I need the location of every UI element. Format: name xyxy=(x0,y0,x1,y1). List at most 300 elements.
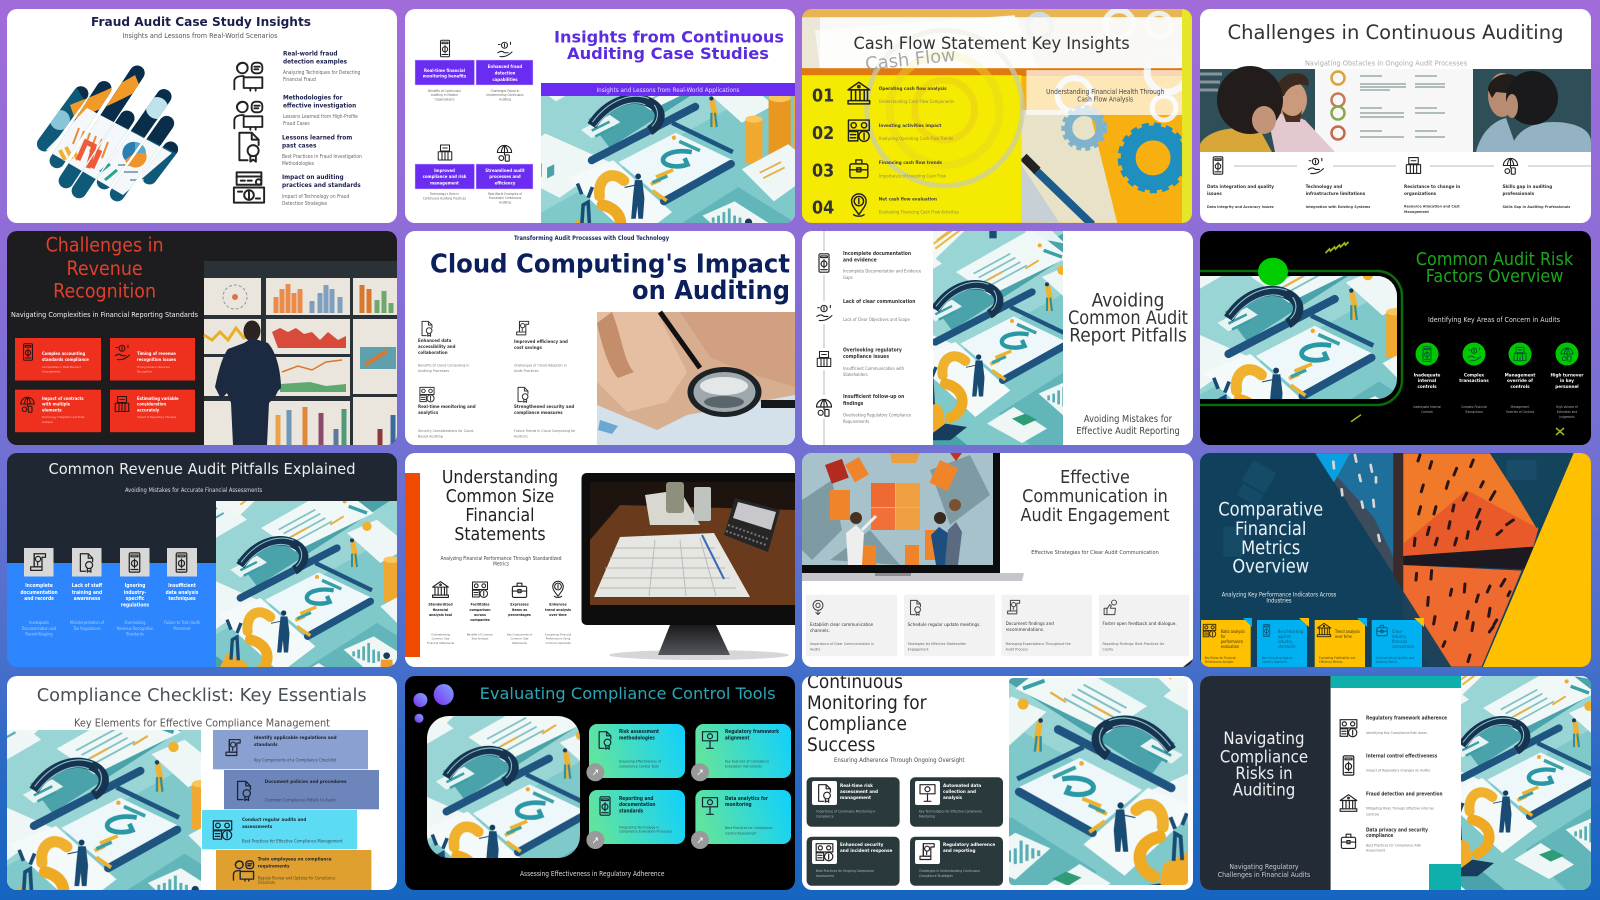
red cards: Arrangements xyxy=(42,370,61,374)
monitor with desk photo xyxy=(582,473,795,660)
four columns: Statements xyxy=(512,641,528,645)
tool cards xyxy=(586,724,791,849)
tool cards: Key Features of Compliance xyxy=(725,759,769,763)
pitfall columns: Insufficient xyxy=(168,583,197,589)
title: Metrics xyxy=(1241,538,1300,559)
yellow list panel xyxy=(802,75,1021,223)
subtitle: Metrics xyxy=(493,561,509,568)
dark cards: Compliance Strategies xyxy=(919,874,953,878)
title xyxy=(1021,467,1170,526)
photo: man viewing dashboards xyxy=(204,261,397,445)
panel: Evaluating Compliance Control Tools slide xyxy=(405,676,795,890)
metric cards: Benchmarking Against xyxy=(1262,656,1293,660)
numbered list: Understanding Cash Flow Components xyxy=(879,99,954,104)
pitfall columns: specific xyxy=(126,596,145,602)
four strategy cards: Schedule regular update meetings. xyxy=(908,622,981,628)
title: Success xyxy=(807,734,875,756)
four challenges: Management xyxy=(1404,210,1429,214)
tool cards: ↗ xyxy=(592,835,599,847)
title band xyxy=(820,17,1182,75)
metric cards xyxy=(1201,618,1424,667)
timeline list: Lack of clear communication xyxy=(843,299,916,305)
title xyxy=(442,466,558,544)
four columns: Size Analysis xyxy=(472,637,489,641)
step cards: Key Components of a Compliance Checklist xyxy=(254,757,337,762)
sliced dashboard illustration xyxy=(36,66,178,202)
pitfall columns: Revenue Recognition xyxy=(117,627,154,631)
panel: Cash Flow Statement slide xyxy=(802,9,1192,223)
timeline list: Lack of Clear Objectives and Scope xyxy=(843,317,910,322)
metric cards: financial xyxy=(1392,640,1407,644)
risk list: compliance xyxy=(1366,833,1393,839)
title xyxy=(46,235,164,303)
four columns: Understanding xyxy=(431,633,450,637)
four challenges: Resource Allocation and Cost xyxy=(1404,204,1460,209)
banner: Insights and Lessons from Real-World Applications xyxy=(596,87,740,94)
title: Auditing Case Studies xyxy=(567,44,769,63)
risk factors: controls xyxy=(1417,384,1437,390)
title: Comparative xyxy=(1218,500,1323,521)
title xyxy=(1068,290,1188,347)
pitfall columns: and records xyxy=(24,596,54,602)
four strategy cards: Engagement xyxy=(908,648,929,652)
four columns: Key Components of xyxy=(507,633,533,637)
title xyxy=(430,249,790,305)
red cards: Complex accounting xyxy=(42,351,85,356)
four challenges: Resistance to change in xyxy=(1404,184,1460,190)
pitfall columns: Lack of staff xyxy=(72,583,102,589)
tool cards: standards xyxy=(619,808,643,815)
timeline list: compliance issues xyxy=(843,354,889,360)
risk factors: Complex xyxy=(1464,372,1484,379)
title: Compliance Checklist: Key Essentials xyxy=(37,685,367,706)
title: Overview xyxy=(1232,557,1309,578)
risk factors: Judgments xyxy=(1558,415,1575,419)
benefit cards: Technology's Role in xyxy=(429,192,459,196)
four challenges: Data integration and quality xyxy=(1207,184,1274,190)
risk factors: Transactions xyxy=(1464,410,1483,414)
purple circles xyxy=(413,684,454,723)
orange side bar xyxy=(405,473,420,657)
step cards: Common Compliance Pitfalls to Avoid xyxy=(265,797,336,803)
four columns: companies xyxy=(470,618,490,622)
benefit cards: management xyxy=(430,180,459,186)
benefit cards: Successful Continuous xyxy=(489,196,522,200)
dark cards: Best Practices for Ongoing Compliance xyxy=(816,869,874,873)
red cards: standards compliance xyxy=(42,357,89,362)
benefit cards: Challenges Faced in xyxy=(491,89,519,93)
dark side panel xyxy=(1200,676,1331,890)
benefit cards: Streamlined audit xyxy=(485,168,525,173)
subtitle: Navigating Complexities in Financial Reporting Standards xyxy=(11,312,198,319)
tool cards: Regulatory framework xyxy=(725,729,780,735)
metric cards: Cross- xyxy=(1392,630,1403,634)
pitfall columns: Ignoring xyxy=(125,583,145,589)
four columns: Enhances xyxy=(549,603,567,607)
subtitle: Industries xyxy=(1266,598,1292,605)
dark cards: Compliance xyxy=(816,815,834,819)
step cards: standards xyxy=(254,742,278,748)
benefit cards: Implementing Continuous xyxy=(486,93,524,97)
dark cards: analysis xyxy=(943,795,963,801)
numbered list: 01 xyxy=(812,85,834,106)
risk factors: personnel xyxy=(1555,384,1579,390)
numbered list: 03 xyxy=(812,160,834,181)
pitfall columns: training and xyxy=(72,590,102,596)
risk factors: internal xyxy=(1418,378,1437,384)
benefit cards: Benefits of Continuous xyxy=(428,89,461,93)
risk factors: Estimates and xyxy=(1557,410,1577,414)
metric cards: performance xyxy=(1221,640,1244,644)
four columns: Common-Size Data xyxy=(546,641,571,645)
list: four insights: Detection Strategies xyxy=(282,201,328,207)
four columns: Comparing Financial xyxy=(545,633,571,637)
subtitle xyxy=(1218,863,1311,879)
panel: Compliance Checklist slide xyxy=(7,676,397,890)
dark cards: Automated data xyxy=(943,783,981,789)
pitfall columns xyxy=(20,548,200,637)
tool cards: Risk assessment xyxy=(619,729,660,735)
title: Revenue xyxy=(67,258,143,280)
benefit cards: Improved xyxy=(434,168,455,173)
title: Understanding xyxy=(442,466,558,487)
laptop with teamwork photo xyxy=(802,453,1024,581)
four challenges: Technology and xyxy=(1306,184,1342,190)
four columns: Expresses xyxy=(510,603,529,607)
metric cards: comparisons xyxy=(1392,645,1414,649)
pitfall columns: Record Keeping xyxy=(25,632,53,637)
dark cards: and reporting xyxy=(943,848,975,854)
step cards: Checklists xyxy=(258,881,275,885)
list: four insights: past cases xyxy=(282,142,317,150)
title: Insights from Continuous xyxy=(554,28,784,47)
timeline list: Insufficient follow-up on xyxy=(843,394,905,400)
red cards: Estimating variable xyxy=(137,396,179,401)
step cards: assessments xyxy=(242,824,273,830)
four columns: over time xyxy=(549,613,567,617)
title band: Cash Flow Statement Key Insights xyxy=(853,33,1130,53)
numbered list: Operating cash flow analysis xyxy=(879,86,947,92)
pitfall columns: Personnel xyxy=(173,627,191,631)
risk factors: Management xyxy=(1511,405,1530,409)
step cards: requirements xyxy=(258,863,290,870)
title: Statements xyxy=(454,523,546,544)
title: Challenges in Continuous Auditing xyxy=(1228,22,1564,44)
illustration xyxy=(7,730,201,890)
risk list: Data privacy and security xyxy=(1366,827,1428,834)
timeline list: Overlooking Regulatory Compliance xyxy=(843,412,912,418)
pitfall columns: awareness xyxy=(74,596,100,602)
four columns: Performance Using xyxy=(546,637,570,641)
risk list: Internal control effectiveness xyxy=(1366,753,1438,760)
list: four insights: Lessons learned from xyxy=(282,134,352,142)
benefit cards: Real-World Examples of xyxy=(488,192,523,196)
pitfall columns: Overlooking xyxy=(124,621,146,625)
risk factors: transactions xyxy=(1459,378,1489,384)
benefit cards: detection xyxy=(495,70,515,76)
list: four insights: Lessons Learned from High-Profile xyxy=(283,114,358,120)
subtitle: Analyzing Financial Performance Through Standardized xyxy=(440,556,562,562)
title xyxy=(1218,500,1323,578)
feature items: collaboration xyxy=(418,350,448,355)
footer subtitle: Assessing Effectiveness in Regulatory Adherence xyxy=(520,871,665,878)
four strategy cards: Managing Expectations Throughout the xyxy=(1006,642,1071,646)
risk list: Fraud detection and prevention xyxy=(1366,791,1443,798)
subtitle xyxy=(1222,592,1336,605)
risk list: Impact of Regulatory Changes on Audits xyxy=(1366,769,1430,773)
step cards: Conduct regular audits and xyxy=(242,817,306,823)
benefit cards: Auditing xyxy=(499,97,511,102)
feature items: compliance measures xyxy=(514,410,563,415)
panel: Insights from Continuous Auditing slide xyxy=(405,9,795,223)
metric cards: Benchmarking xyxy=(1278,630,1304,634)
feature items: Strengthened security and xyxy=(514,404,574,409)
numbered list: Importance of Investing Cash Flow xyxy=(879,173,947,179)
four challenges: Integration with Existing Systems xyxy=(1306,205,1370,209)
list: four insights: practices and standards xyxy=(282,182,361,189)
pitfall columns: Tax Regulations xyxy=(72,627,101,631)
decorative green circle xyxy=(1258,258,1288,286)
subtitle: Avoiding Mistakes for Accurate Financial Assessments xyxy=(125,488,262,494)
dark cards xyxy=(807,777,1003,886)
risk factors: High turnover xyxy=(1551,372,1584,379)
numbered list: Investing activities impact xyxy=(879,123,942,129)
banner xyxy=(541,83,795,96)
red cards: Analysis xyxy=(42,420,53,424)
title: Cloud Computing's Impact xyxy=(430,249,790,279)
dark cards: assessment and xyxy=(840,789,878,795)
timeline list: Insufficient Communication with xyxy=(843,366,905,371)
list: four insights: Methodologies for xyxy=(283,94,343,102)
feature items: Challenges of Cloud Adoption in xyxy=(514,364,567,368)
subtitle box: Cash Flow Analysis xyxy=(1077,96,1133,104)
risk factors: Complex Financial xyxy=(1461,405,1487,409)
feature items: accessibility and xyxy=(418,344,455,349)
four columns: Standardized xyxy=(428,603,453,607)
panel: Comparative Financial Metrics slide xyxy=(1200,453,1591,667)
illustration with green frame xyxy=(1200,270,1404,406)
metric cards: for xyxy=(1221,635,1226,639)
benefit cards: efficiency xyxy=(495,180,516,186)
illustration xyxy=(541,96,795,223)
risk factors: High Volume of xyxy=(1556,405,1579,409)
subtitle xyxy=(1076,415,1180,437)
subtitle: Key Elements for Effective Compliance Management xyxy=(74,718,330,730)
pitfall columns: Incomplete xyxy=(25,583,53,589)
step cards: Train employees on compliance xyxy=(258,856,332,863)
risk factors: in key xyxy=(1560,378,1574,384)
risk factors: Inadequate xyxy=(1414,372,1440,379)
risk factors xyxy=(1413,342,1584,419)
subtitle: Insights and Lessons from Real-World Scenarios xyxy=(123,32,278,40)
magnifier ring xyxy=(867,30,1022,186)
list: four insights: effective investigation xyxy=(283,102,356,110)
panel: Fraud Audit Case Study Insights slide xyxy=(7,9,397,223)
red cards: Technology Integration and Data xyxy=(41,415,85,419)
tool cards: Compliance Control Tools xyxy=(619,765,659,769)
tool cards: Best Practices for Compliance xyxy=(725,826,773,830)
title: Factors Overview xyxy=(1426,266,1563,287)
panel: Cloud Computing's Impact slide xyxy=(405,231,795,445)
teal accents xyxy=(1331,676,1461,890)
benefit cards: Auditing xyxy=(499,200,511,205)
title: Avoiding xyxy=(1092,290,1164,312)
four columns: comparison xyxy=(469,608,491,612)
accent squiggles xyxy=(1326,242,1564,435)
pitfall columns: Standards xyxy=(126,632,144,637)
subtitle: Navigating Regulatory xyxy=(1229,863,1299,871)
feature items: Enhanced data xyxy=(418,338,452,343)
red cards xyxy=(15,338,195,432)
timeline list: and evidence xyxy=(843,257,877,264)
metric cards: over time xyxy=(1335,635,1352,639)
title xyxy=(807,671,927,756)
pitfall columns: Inadequate xyxy=(29,621,50,625)
dark cards: and incident response xyxy=(840,848,892,854)
subtitle: Ensuring Adherence Through Ongoing Oversight xyxy=(834,758,965,764)
illustration xyxy=(427,716,580,858)
feature items: Auditing Processes xyxy=(418,369,449,373)
metric cards: against xyxy=(1278,635,1291,639)
tool cards: ↗ xyxy=(592,767,599,779)
benefit cards: Auditing in Modern xyxy=(431,93,458,97)
title: Challenges in xyxy=(46,235,164,257)
numbered list: Analyzing Operating Cash Flow Trends xyxy=(879,136,953,141)
timeline list xyxy=(813,231,922,445)
tool cards: Control Assessment xyxy=(725,831,757,836)
panel: Avoiding Common Audit Report Pitfalls slide xyxy=(802,231,1193,445)
metric cards: Ratio analysis xyxy=(1221,630,1245,634)
illustration mirrored xyxy=(1009,678,1188,885)
four strategy cards: Reporting Findings: Best Practices for xyxy=(1102,642,1165,646)
four columns: across xyxy=(474,613,486,617)
illustration xyxy=(216,501,397,667)
tool cards: Data analytics for xyxy=(725,796,769,802)
pitfall columns: documentation xyxy=(20,590,58,596)
subtitle xyxy=(440,556,562,568)
four columns: items as xyxy=(512,608,527,612)
feature items xyxy=(418,321,576,439)
panel: Continuous Monitoring slide xyxy=(802,676,1193,890)
four columns: Common Size xyxy=(432,637,450,641)
metric cards: industry xyxy=(1392,635,1407,639)
feature items: Audit Practices xyxy=(514,369,539,373)
title: Report Pitfalls xyxy=(1069,325,1187,347)
metric cards: standards xyxy=(1278,645,1295,649)
timeline list: Stakeholders xyxy=(843,372,868,377)
title band: Cash Flow xyxy=(864,45,957,75)
four columns: financial xyxy=(433,608,448,612)
four columns xyxy=(427,581,571,645)
feature items: Based Auditing xyxy=(418,435,443,439)
pitfall columns: Misinterpretation of xyxy=(70,621,105,625)
red cards: recognition issues xyxy=(137,357,177,362)
metric cards: Solvency Ratios xyxy=(1376,660,1397,664)
corner mark xyxy=(1183,659,1193,667)
list: four insights: Best Practices in Fraud Investigation xyxy=(282,154,362,160)
panel: Common Revenue Audit Pitfalls slide xyxy=(7,453,397,667)
benefit cards: Continuous Auditing Practices xyxy=(423,196,466,201)
red cards: consideration xyxy=(137,401,166,407)
title: Effective xyxy=(1060,467,1130,488)
dark cards: Regulatory adherence xyxy=(943,842,995,848)
tool cards: monitoring xyxy=(725,802,752,808)
panel: Challenges in Revenue Recognition slide xyxy=(7,231,397,445)
benefit cards: Organizations xyxy=(435,97,455,102)
title: Recognition xyxy=(53,281,156,303)
panel: Challenges in Continuous Auditing slide xyxy=(1200,9,1591,223)
risk list: Regulatory framework adherence xyxy=(1366,715,1447,722)
subtitle box xyxy=(1026,70,1182,115)
benefit cards: processes and xyxy=(489,174,521,179)
step cards: Identify applicable regulations and xyxy=(254,735,337,741)
risk factors: Management xyxy=(1505,372,1536,379)
list: four insights: detection examples xyxy=(283,58,347,66)
four columns: Common Size xyxy=(511,637,529,641)
background photo: gears and magnifier xyxy=(802,9,1192,226)
title: Navigating xyxy=(1223,728,1305,748)
dark cards: Key Technologies for Effective Compliance xyxy=(919,810,982,814)
subtitle: Challenges in Financial Audits xyxy=(1218,871,1311,879)
red cards: Timing Issues in Revenue xyxy=(136,365,170,369)
feature items: Improved efficiency and xyxy=(514,339,568,344)
red cards: with multiple xyxy=(42,401,70,407)
four strategy cards: Document findings and xyxy=(1006,621,1054,627)
dark cards: Real-time risk xyxy=(840,783,874,789)
tool cards: Integrating Technology in xyxy=(619,825,659,829)
timeline list: Requirements xyxy=(843,419,869,424)
pitfall columns: data analysis xyxy=(166,590,199,596)
title: on Auditing xyxy=(632,276,790,305)
tool cards: Reporting and xyxy=(619,796,653,802)
meeting photo xyxy=(1200,66,1591,152)
list: four insights: Fraud Cases xyxy=(283,121,310,127)
feature items: Security Considerations for Cloud- xyxy=(418,429,475,433)
feature items: analytics xyxy=(418,410,439,415)
dark cards: Challenges in Understanding Continuous xyxy=(919,869,980,873)
title: Audit Engagement xyxy=(1021,505,1170,526)
step cards: Best Practices for Effective Compliance Management xyxy=(242,838,343,844)
four columns: Financial Statements xyxy=(427,641,455,645)
red cards: accurately xyxy=(137,407,160,413)
panel: Navigating Compliance Risks slide xyxy=(1200,676,1591,890)
feature items: Future Trends in Cloud Computing for xyxy=(514,429,576,433)
title: Evaluating Compliance Control Tools xyxy=(480,684,776,703)
illustration xyxy=(933,231,1063,445)
four challenges: Skills gap in auditing xyxy=(1502,184,1552,190)
title: Monitoring for xyxy=(807,692,927,714)
dark cards: Monitoring xyxy=(919,815,935,819)
dark cards: collection and xyxy=(943,789,976,795)
feature items: Benefits of Cloud Computing in xyxy=(418,364,469,368)
benefit cards: capabilities xyxy=(492,77,518,82)
subtitle: Analyzing Key Performance Indicators Across xyxy=(1222,592,1336,599)
numbered list xyxy=(812,82,959,218)
panel: Understanding Common Size Statements slide xyxy=(405,453,795,667)
title: Auditing xyxy=(1233,780,1295,800)
four strategy cards xyxy=(806,595,1189,656)
risk factors: controls xyxy=(1510,384,1530,390)
four challenges: professionals xyxy=(1502,191,1534,197)
metric cards: Key Ratios for Financial xyxy=(1205,656,1236,660)
step cards: Document policies and procedures xyxy=(265,779,347,785)
title xyxy=(1220,728,1308,800)
metric cards: Evaluating Profitability and xyxy=(1319,656,1356,660)
subtitle box: Understanding Financial Health Through xyxy=(1046,89,1164,96)
red cards: Impact of Regulatory Changes xyxy=(137,415,177,419)
red cards: Impact of contracts xyxy=(42,396,84,401)
pitfall columns: industry- xyxy=(124,590,146,596)
